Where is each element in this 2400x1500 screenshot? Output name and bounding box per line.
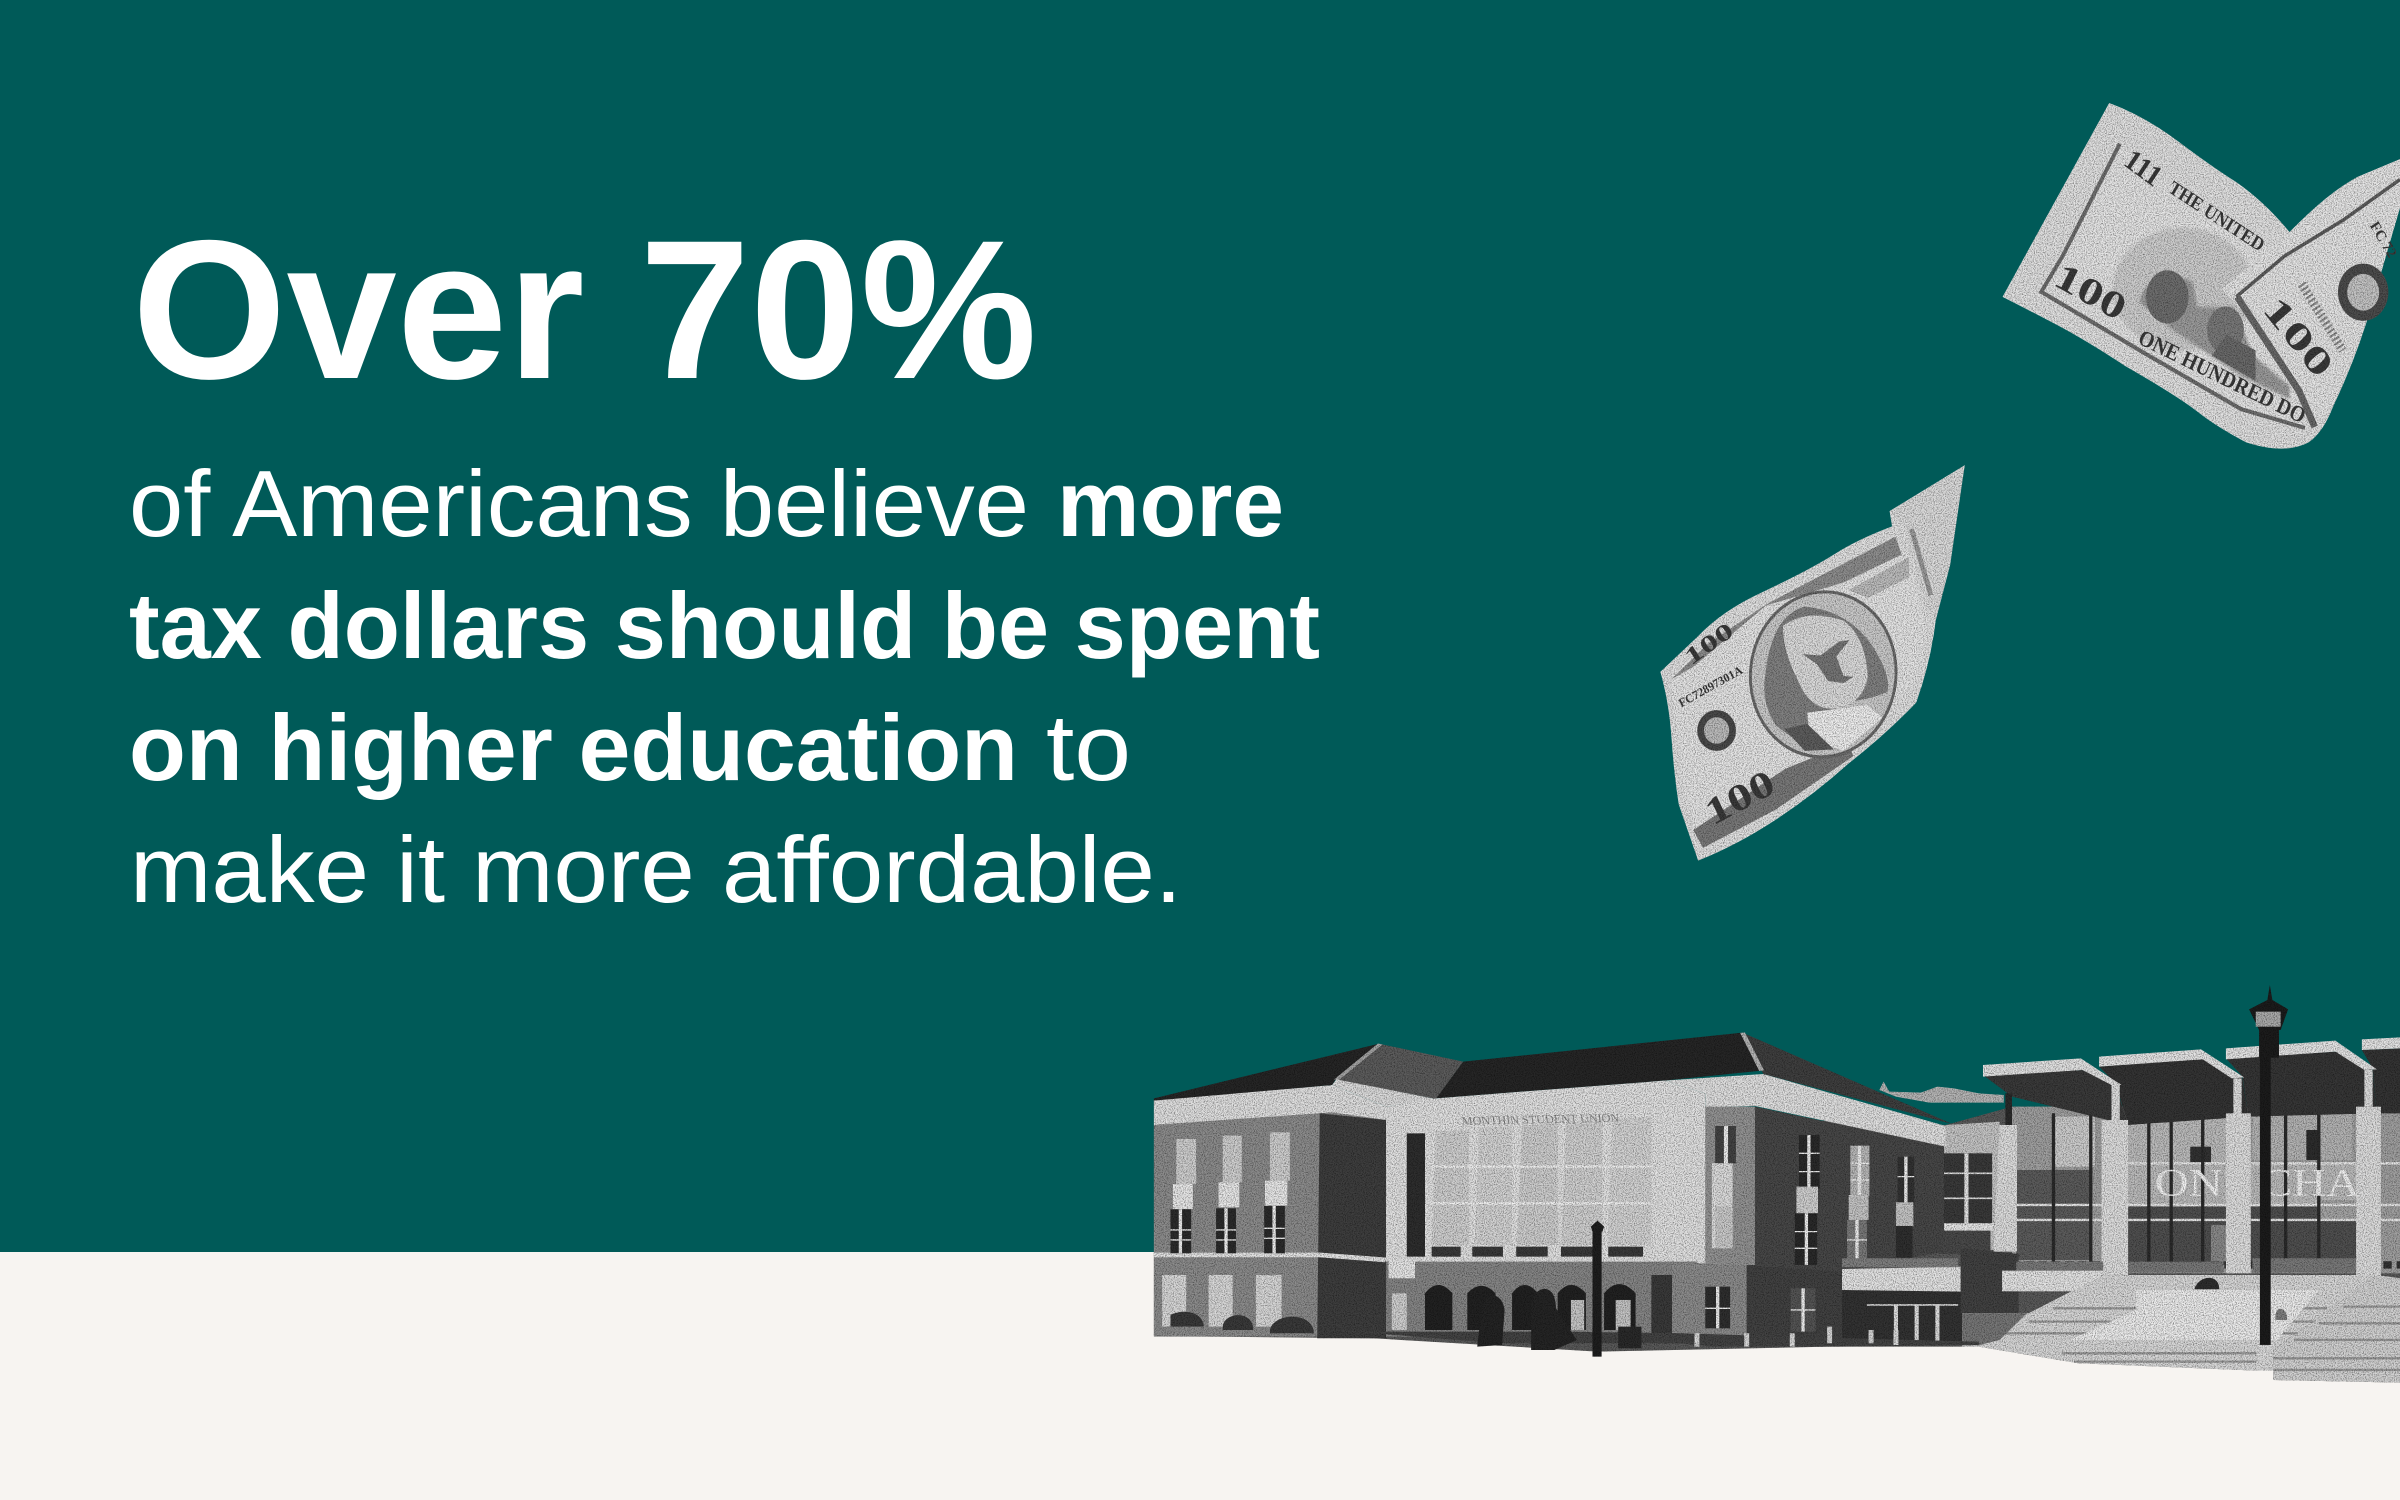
illustration: falling dollar bill, reverse side: 100 (2255, 288, 2342, 385)
pavilion canopy (1983, 1037, 2400, 1125)
cream footer band (0, 1252, 2400, 1500)
tall lamp post (2249, 985, 2288, 1365)
statement text block (129, 451, 1320, 922)
illustration: falling dollar bill, Franklin portrait: 100 (1698, 761, 1781, 833)
main brick right wing (1664, 1074, 1946, 1272)
building backing silhouette (1154, 1100, 2400, 1383)
lower right wing and entrance (1672, 1248, 2356, 1345)
statement text block: of Americans believe (129, 451, 1029, 556)
central atrium facade: MONTHIN STUDENT UNION (1461, 1111, 1620, 1128)
headline: Over 70%: Over 70% (132, 199, 1037, 420)
central atrium facade (1386, 1081, 1705, 1337)
illustration: falling dollar bill, Franklin portrait (1660, 465, 1965, 861)
ground furniture and people (1154, 1289, 1979, 1350)
illustration: falling dollar bill, reverse side: ONE HUNDRED DO (2135, 324, 2310, 428)
statement text block: tax dollars should be spent (129, 573, 1320, 678)
pavilion glass wall (2012, 1107, 2400, 1273)
illustration: falling dollar bill, reverse side: 100 (2048, 254, 2133, 328)
main building left wing (1154, 1085, 1386, 1338)
statement text block: on higher education (129, 695, 1018, 800)
statement text block: more (1057, 451, 1284, 556)
small lamp post (1591, 1221, 1604, 1357)
illustration: falling dollar bill, reverse side (2003, 103, 2400, 449)
illustration: falling dollar bill, Franklin portrait: 100 (1680, 617, 1738, 670)
illustration: campus building collage (1154, 985, 2400, 1383)
illustration: falling dollar bill, reverse side: 111 (2118, 143, 2168, 193)
link block between wings (1936, 1122, 2000, 1254)
background tree tufts (1879, 1082, 2004, 1103)
statement text block: make it more affordable. (130, 817, 1182, 922)
illustration: falling dollar bill, Franklin portrait: FC72897301A (1676, 663, 1745, 710)
roof (1154, 1033, 1952, 1124)
illustration: falling dollar bill, reverse side: FC 72 (2366, 219, 2399, 261)
statement text block: to (1046, 695, 1131, 800)
pavilion pillars (1994, 1070, 2381, 1277)
plaza steps (1962, 1275, 2400, 1383)
illustration: falling dollar bill, reverse side: THE UNITED (2165, 177, 2268, 256)
